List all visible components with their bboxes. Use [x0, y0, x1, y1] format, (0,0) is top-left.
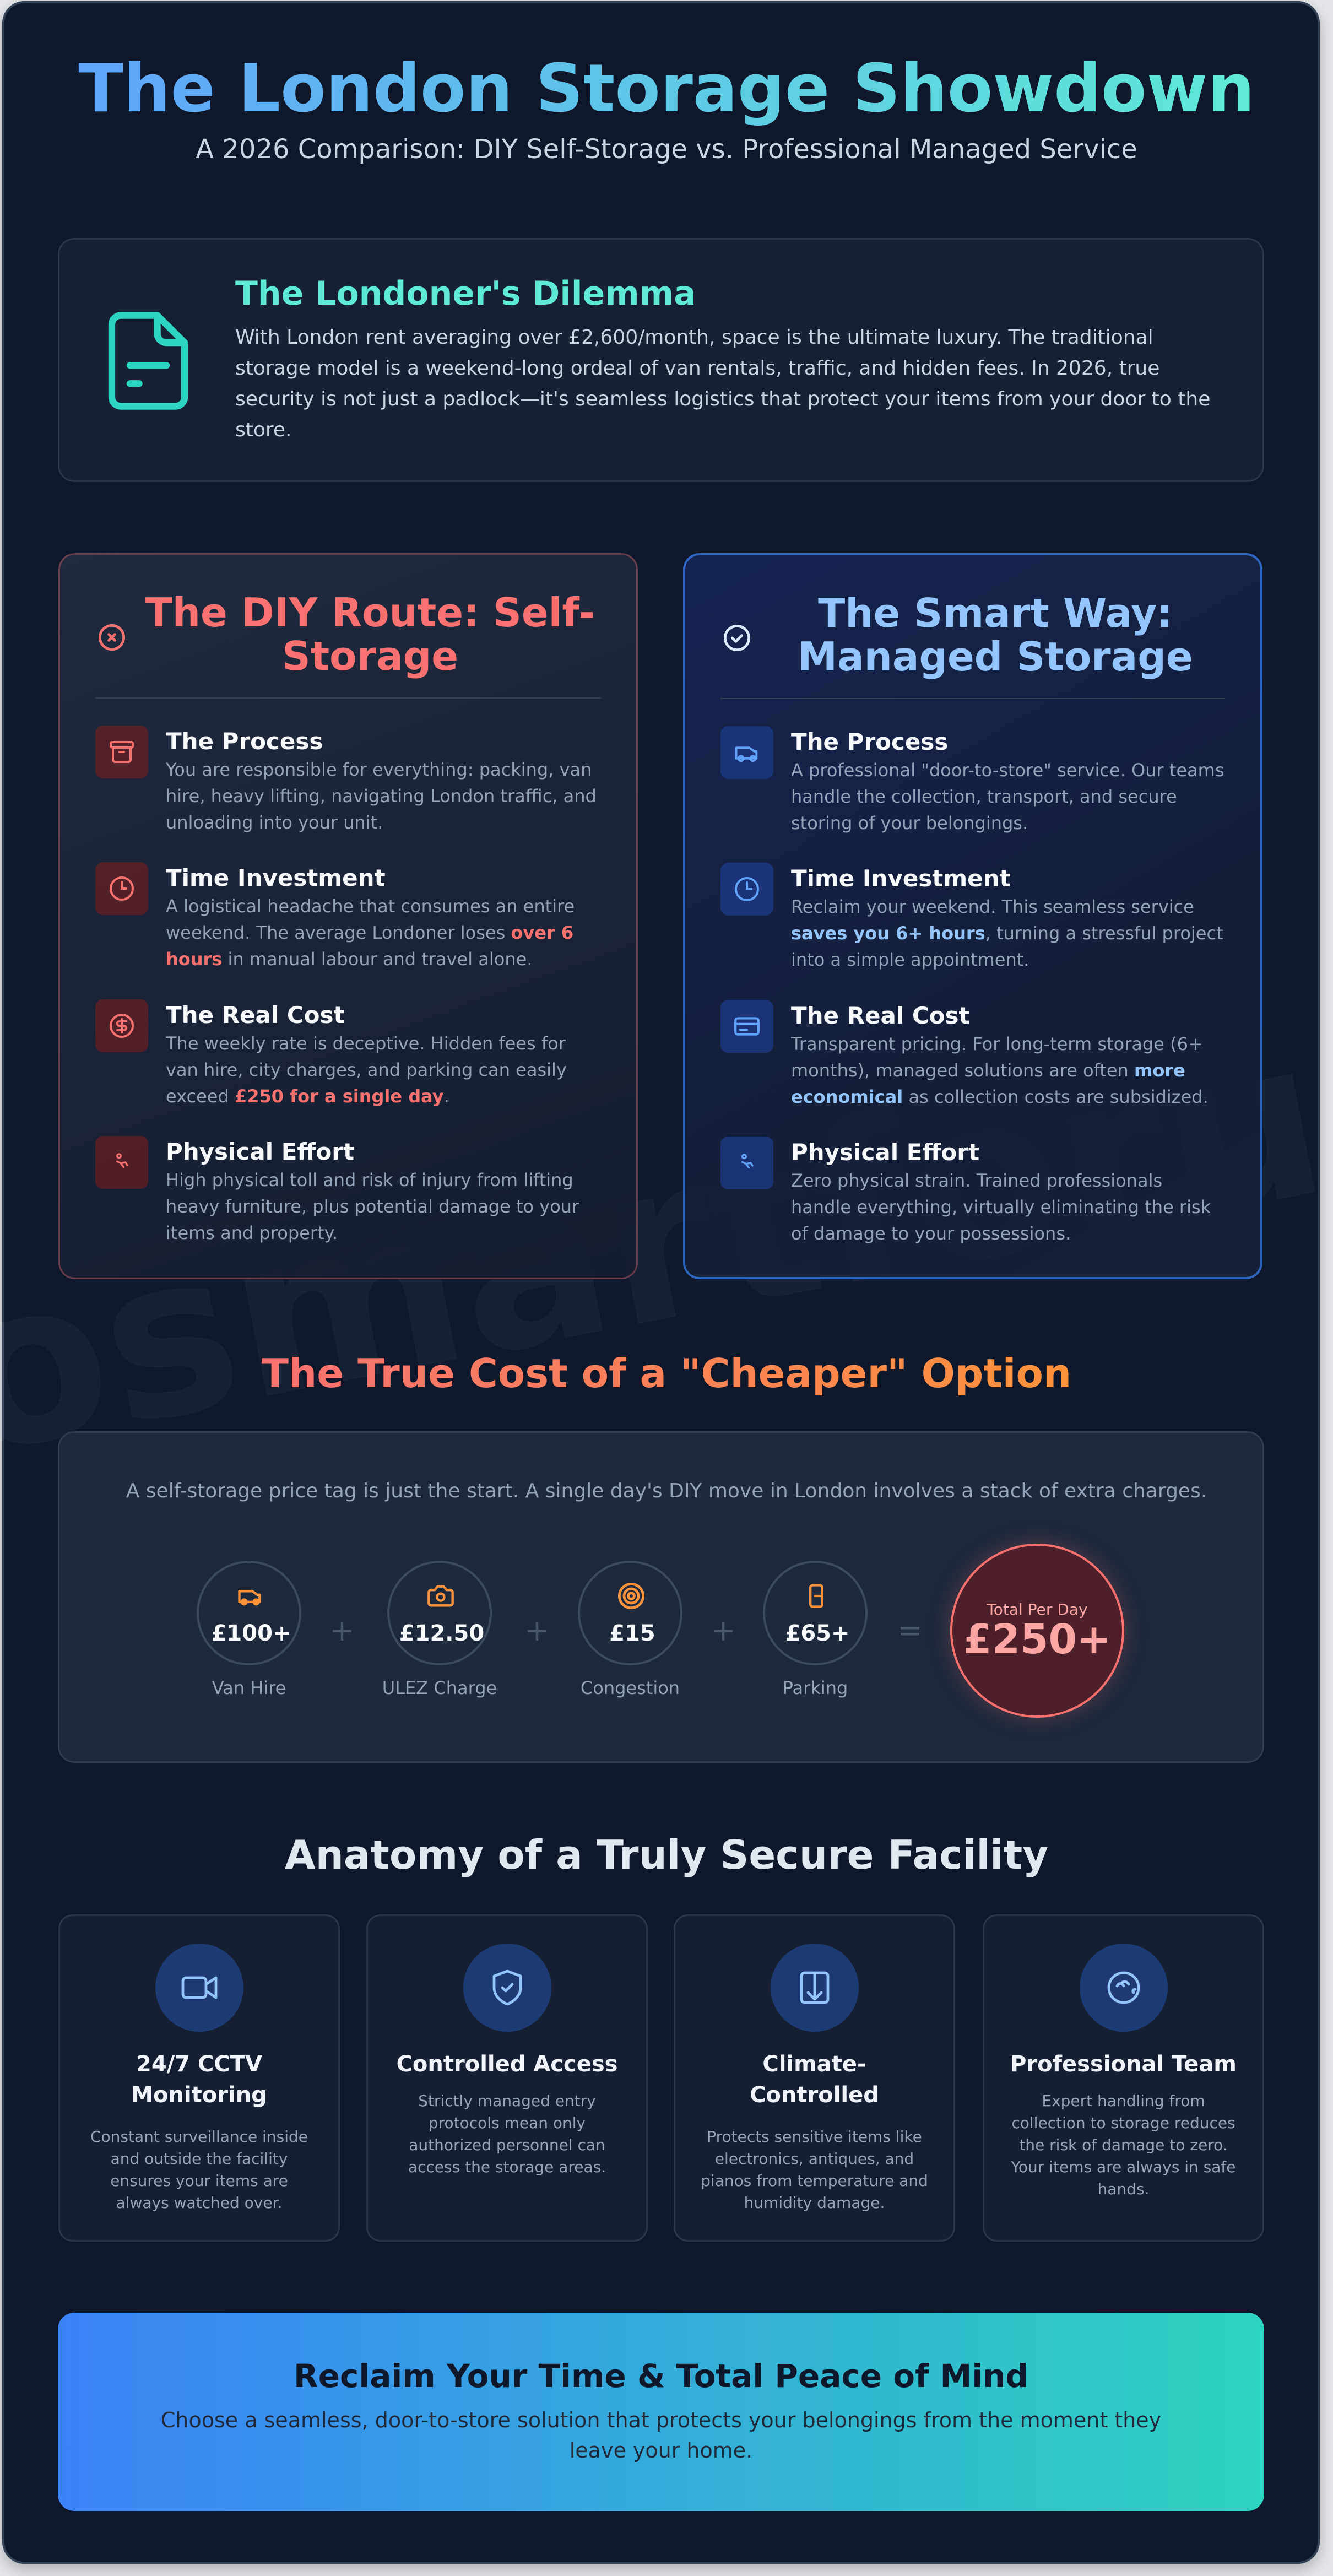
cost item: ULEZ: £12.50 [399, 1621, 484, 1646]
feature card: CCTV: 24/7 CCTV [136, 2052, 262, 2077]
panel: dilemma [58, 238, 1264, 482]
text: cost intro: A self-storage price tag is just the start. A single day's DIY move in London involves a stack of extra charges. [126, 1480, 1207, 1502]
feature card: climate [674, 1914, 955, 2242]
item: time: Reclaim your weekend. This seamless service saves you 6+ hours, turning a stressful project into a simple appointment. [791, 896, 1223, 970]
heading: DIY: The DIY Route: Self-Storage [145, 589, 595, 679]
item: process: The Process [791, 728, 948, 755]
feature card: CCTV: Constant surveillance inside and outside the facility ensures your items are always watched over. [90, 2128, 308, 2212]
item: process [95, 726, 597, 833]
feature card: access: Controlled Access [397, 2052, 617, 2077]
item: effort: High physical toll and risk of injury from lifting heavy furniture, plus potential damage to your items and property. [166, 1170, 579, 1243]
operator equals: = [897, 1613, 923, 1648]
operator plus: + [524, 1613, 550, 1648]
item: cost [95, 999, 567, 1107]
feature card: CCTV [58, 1914, 340, 2242]
cost item: van hire: £100+ [212, 1621, 291, 1646]
item: cost: The Real Cost [791, 1002, 970, 1029]
item: effort: Physical Effort [791, 1139, 979, 1166]
total circle: Total Per Day [987, 1600, 1088, 1619]
item: process [720, 726, 1224, 834]
item: effort [720, 1137, 1211, 1244]
text: cta: Choose a seamless, door-to-store solution that protects your belongings from the moment they leave your home. [161, 2408, 1161, 2463]
cost item: ULEZ [387, 1561, 492, 1665]
heading: dilemma: The Londoner's Dilemma [235, 274, 696, 313]
feature card: climate: Protects sensitive items like electronics, antiques, and pianos from temperature and humidity damage. [701, 2128, 928, 2212]
heading: smart: The Smart Way: Managed Storage [798, 590, 1193, 680]
cost item: parking: £65+ [785, 1621, 849, 1646]
label: van hire: Van Hire [212, 1677, 286, 1698]
feature card: team: Expert handling from collection to storage reduces the risk of damage to zero. Your items are always in safe hands. [1011, 2092, 1236, 2198]
heading: true cost: The True Cost of a "Cheaper" Option [262, 1350, 1071, 1397]
item: process: A professional "door-to-store" service. Our teams handle the collection, transport, and secure storing of your belongings. [791, 760, 1224, 834]
operator plus: + [329, 1613, 355, 1648]
item: effort [95, 1136, 579, 1243]
item: time: A logistical headache that consumes an entire weekend. The average Londoner loses over 6 hours in manual labour and travel alone. [166, 896, 575, 970]
cost item: congestion [578, 1561, 682, 1665]
text: dilemma: With London rent averaging over £2,600/month, space is the ultimate luxury. The traditional storage model is a weekend-long ordeal of van rentals, traffic, and hidden fees. In 2026, true security is not just a padlock—it's seamless logistics that protect your items from your door to the store. [235, 326, 1210, 441]
title: The London Storage Showdown [78, 51, 1255, 127]
item: cost: Transparent pricing. For long-term storage (6+ months), managed solutions are often more economical as collection costs are subsidized. [791, 1033, 1209, 1107]
panel: smart way [683, 553, 1262, 1279]
subtitle: A 2026 Comparison: DIY Self-Storage vs. Professional Managed Service [196, 134, 1137, 165]
item: time: Time Investment [791, 865, 1011, 892]
heading: cta: Reclaim Your Time & Total Peace of Mind [294, 2357, 1028, 2395]
cost item: parking [763, 1561, 868, 1665]
icon: x circle [98, 624, 126, 651]
feature card: CCTV: Monitoring [131, 2082, 267, 2108]
total circle [950, 1544, 1124, 1718]
cost item: van hire [197, 1561, 301, 1665]
panel: DIY route [58, 553, 638, 1279]
icon: check circle [724, 625, 750, 651]
item: process: You are responsible for everything: packing, van hire, heavy lifting, navigating London traffic, and unloading into your unit. [166, 759, 597, 833]
cost item: congestion: £15 [609, 1621, 655, 1646]
feature card: climate: Controlled [750, 2082, 879, 2108]
feature card: access [366, 1914, 648, 2242]
panel: cost breakdown [58, 1431, 1264, 1763]
label: parking: Parking [783, 1677, 848, 1698]
item: process: The Process [166, 728, 323, 755]
item: cost: The Real Cost [166, 1002, 345, 1029]
item: cost [720, 1000, 1209, 1107]
call to action [58, 2313, 1264, 2511]
feature card: team: Professional Team [1010, 2052, 1237, 2077]
item: time [720, 863, 1223, 970]
item: effort: Physical Effort [166, 1138, 354, 1165]
icon: document [108, 312, 188, 410]
item: time: Time Investment [166, 864, 386, 891]
label: ULEZ: ULEZ Charge [382, 1677, 497, 1698]
item: cost: The weekly rate is deceptive. Hidden fees for van hire, city charges, and parking can easily exceed £250 for a single day. [166, 1033, 567, 1107]
label: congestion: Congestion [581, 1677, 680, 1698]
feature card: access: Strictly managed entry protocols mean only authorized personnel can access the storage areas. [408, 2092, 606, 2176]
feature card: climate: Climate- [762, 2052, 866, 2077]
item: effort: Zero physical strain. Trained professionals handle everything, virtually eliminating the risk of damage to your possessions. [791, 1170, 1211, 1244]
feature card: team [983, 1914, 1264, 2242]
operator plus: + [711, 1613, 736, 1648]
heading: anatomy: Anatomy of a Truly Secure Facility [285, 1832, 1048, 1878]
item: time [95, 862, 575, 970]
total circle: £250+ [963, 1616, 1111, 1663]
